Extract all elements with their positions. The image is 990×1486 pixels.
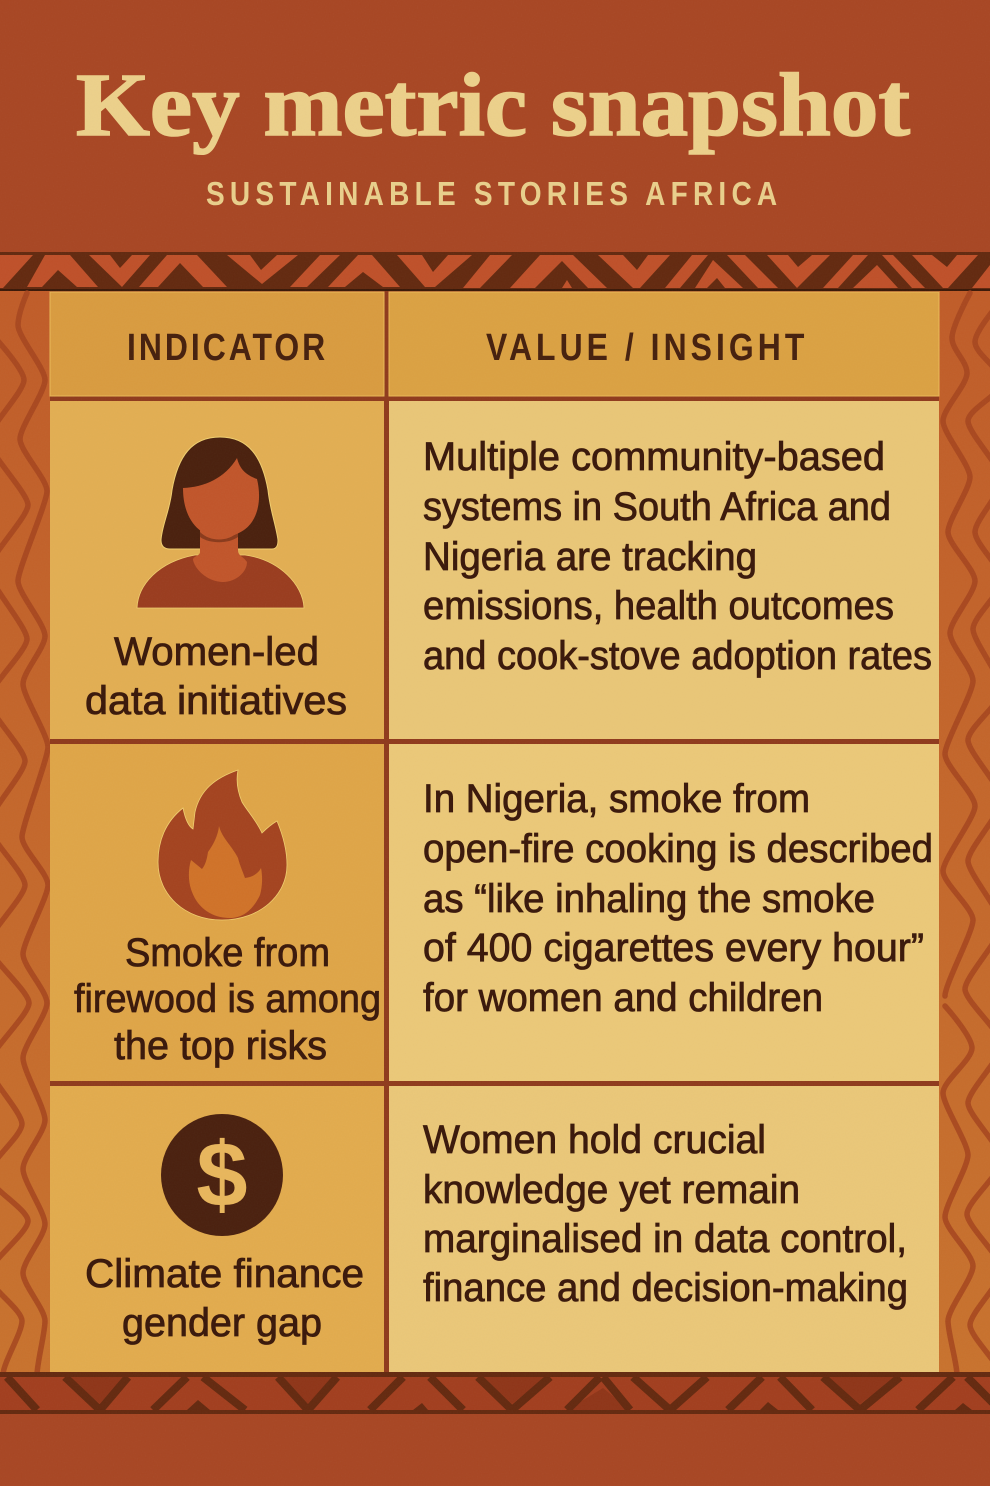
- row 3 insight cell: marginalised in data control,: [423, 1217, 907, 1261]
- label: smoke from firewood: the top risks: [114, 1024, 327, 1068]
- label: climate finance gender gap: gender gap: [122, 1301, 322, 1345]
- left side wave panel: [0, 291, 50, 1375]
- label: smoke from firewood: firewood is among: [74, 977, 381, 1021]
- row 1 indicator cell: [50, 401, 384, 739]
- row 3 insight cell: knowledge yet remain: [423, 1168, 800, 1212]
- label: smoke from firewood: [74, 931, 381, 1068]
- row 2 insight cell: open-fire cooking is described: [423, 827, 933, 871]
- table header: value / insight: VALUE / INSIGHT: [486, 326, 805, 369]
- table grid background: [50, 291, 939, 1372]
- row 1 insight cell: and cook-stove adoption rates: [423, 634, 932, 678]
- row 1 insight cell: [389, 401, 939, 739]
- row 2 insight cell: for women and children: [423, 976, 823, 1020]
- table header: indicator: INDICATOR: [127, 326, 325, 369]
- icon: dollar coin: [161, 1114, 283, 1236]
- row 2 indicator cell: [50, 744, 384, 1081]
- row 1 insight cell: emissions, health outcomes: [423, 584, 894, 628]
- row 2 insight cell: [389, 744, 939, 1081]
- row 3 insight cell: Women hold crucial: [423, 1118, 766, 1162]
- row 1 insight cell: Nigeria are tracking: [423, 535, 757, 579]
- right side wave panel: [939, 291, 990, 1378]
- subtitle: SUSTAINABLE STORIES AFRICA: [206, 176, 777, 213]
- row 1 insight cell: systems in South Africa and: [423, 485, 891, 529]
- table header: value / insight: [389, 292, 939, 396]
- label: women-led data initiatives: data initiatives: [85, 679, 347, 723]
- header panel: [0, 0, 990, 252]
- row 2 insight cell: as “like inhaling the smoke: [423, 877, 875, 921]
- row 1 insight cell: Multiple community-based: [423, 435, 885, 479]
- row 3 indicator cell: [50, 1086, 384, 1372]
- row 3 insight cell: [389, 1086, 939, 1372]
- icon: woman portrait: [137, 437, 304, 608]
- label: women-led data initiatives: Women-led: [114, 630, 319, 674]
- icon: flame: [158, 770, 287, 920]
- label: climate finance gender gap: Climate finance: [85, 1252, 364, 1296]
- row 3 insight cell: finance and decision-making: [423, 1266, 908, 1310]
- label: smoke from firewood: Smoke from: [125, 931, 330, 975]
- label: women-led data initiatives: [85, 630, 347, 723]
- bottom patterned band: [0, 1372, 990, 1414]
- footer panel: [0, 1414, 990, 1486]
- table header: indicator: [50, 292, 384, 396]
- icon: dollar coin: $: [196, 1124, 248, 1226]
- label: climate finance gender gap: [85, 1252, 364, 1345]
- row 2 insight cell: of 400 cigarettes every hour”: [423, 926, 924, 970]
- top patterned band: [0, 252, 990, 291]
- row 2 insight cell: In Nigeria, smoke from: [423, 777, 810, 821]
- title: Key metric snapshot: [76, 56, 910, 155]
